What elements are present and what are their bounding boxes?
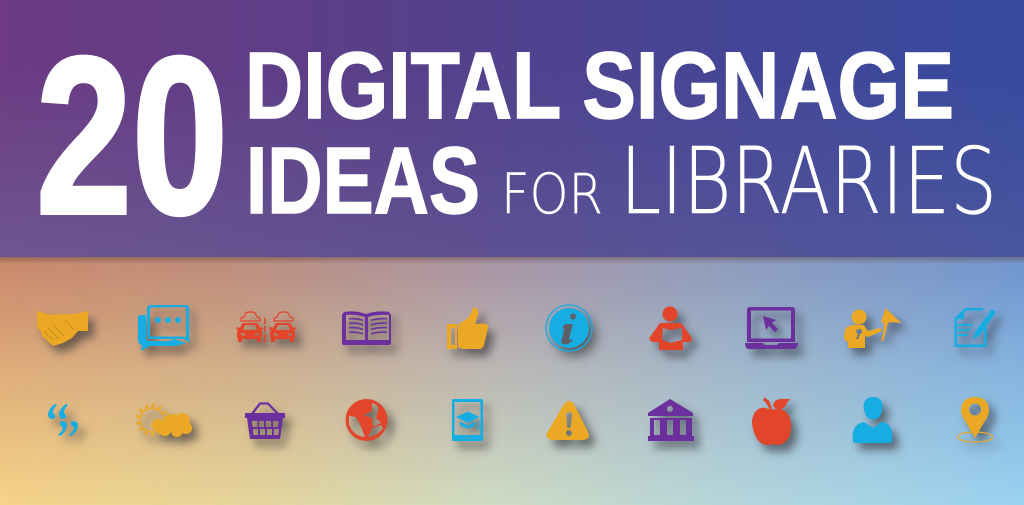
icon: chat bubbles <box>138 305 190 351</box>
heading word: for: FOR <box>501 162 603 226</box>
icon: person reading <box>649 306 692 350</box>
icon: tablet with graduation cap <box>452 399 483 441</box>
icon: map pin <box>958 397 992 442</box>
icon: laptop with cursor <box>745 307 798 349</box>
icon: shopping basket <box>245 404 285 439</box>
icon: person <box>853 397 892 443</box>
icon: sun and cloud <box>138 406 192 437</box>
icon: handshake <box>37 311 88 346</box>
icon: information <box>546 305 592 351</box>
icon: thumbs up <box>447 308 488 349</box>
icon: library building <box>648 399 694 441</box>
icon: open book <box>342 311 391 345</box>
icon: quotation marks <box>48 404 78 436</box>
heading word: ideas: IDEAS <box>246 128 480 234</box>
icon: globe <box>346 399 388 441</box>
icon: guide with flag <box>844 308 902 348</box>
icon: two cars <box>236 312 296 343</box>
number 20: 20 <box>36 11 228 261</box>
title <box>36 11 997 261</box>
icon: warning triangle <box>547 401 589 440</box>
icon: apple <box>752 397 791 445</box>
icon: notepad and pencil <box>954 308 996 347</box>
